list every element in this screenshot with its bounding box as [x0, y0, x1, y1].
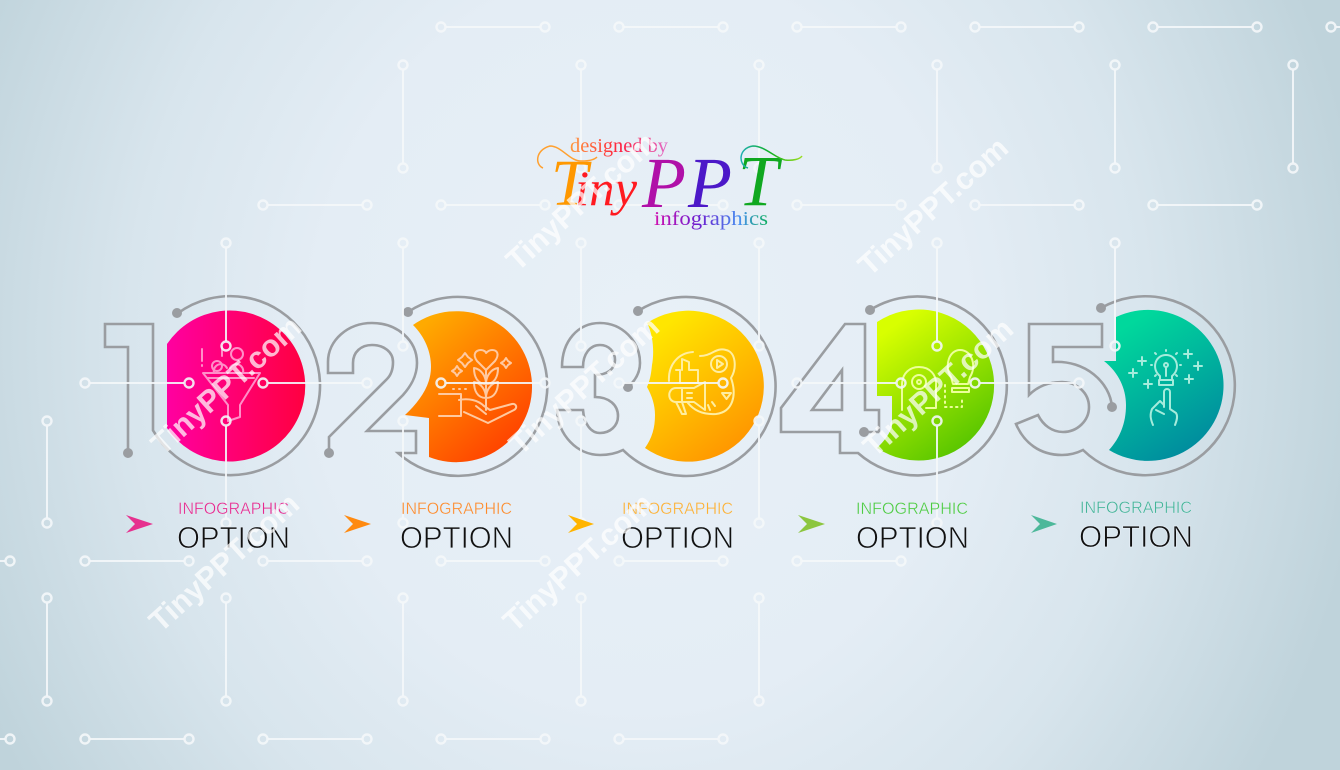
dot: ring 3 end — [633, 306, 643, 316]
dot: numeral 1 start — [123, 448, 133, 458]
watermarks: TinyPPT.com — [143, 487, 306, 639]
option 1 label — [126, 500, 290, 555]
arrow 1 — [126, 515, 153, 533]
logo line: infographics: infographics — [654, 208, 768, 230]
dot: ring 4 end — [865, 305, 875, 315]
outline: numeral 3 and ring — [557, 297, 776, 476]
watermarks: TinyPPT.com — [497, 487, 660, 639]
icon: funnel — [202, 347, 260, 421]
step 2: number and circle — [324, 297, 547, 476]
dot: numeral 5 start — [1107, 402, 1117, 412]
logo line: designed by: designed by — [570, 135, 668, 157]
dot: numeral 4 start — [859, 427, 869, 437]
fill: teal shape — [1104, 310, 1224, 461]
text 5: OPTION — [1079, 519, 1193, 554]
arrow 4 — [798, 515, 825, 533]
step 1: number and circle — [105, 296, 320, 475]
logo letter: T: T — [551, 147, 592, 220]
option 4 label — [798, 500, 969, 555]
logo word: iny: iny — [575, 160, 638, 216]
watermarks — [143, 126, 1020, 639]
outline: numeral 5 and ring — [1016, 296, 1235, 475]
logo letter: first P: P — [641, 143, 686, 223]
arrow 2 — [344, 515, 371, 533]
text 2: OPTION — [400, 520, 513, 555]
step 3: number and circle — [557, 297, 776, 476]
text 1: OPTION — [177, 520, 290, 555]
fill: yellow shape — [645, 311, 764, 462]
step 5: number and circle — [1016, 296, 1235, 475]
option 3 label — [568, 500, 734, 555]
logo swash: first T — [538, 146, 597, 168]
fill: orange shape — [405, 311, 532, 462]
dot: ring 5 end — [1096, 303, 1106, 313]
fill: pink circle — [167, 310, 305, 462]
option 5 label — [1031, 499, 1193, 554]
outline: numeral 4 counter — [812, 370, 842, 410]
icon: megaphone and social — [669, 349, 735, 414]
dot: numeral 2 start — [324, 448, 334, 458]
heading 1: INFOGRAPHIC — [178, 500, 289, 518]
arrow 5 — [1031, 515, 1057, 533]
option 2 label — [344, 500, 513, 555]
logo letter: last T: T — [738, 141, 783, 221]
dot: numeral 3 start — [623, 382, 633, 392]
icon: head gear and bulb — [902, 350, 973, 410]
outline: numeral 4 and ring — [781, 296, 1007, 475]
outline: numeral 2 and ring — [328, 297, 547, 476]
watermarks: TinyPPT.com — [503, 310, 666, 462]
text 3: OPTION — [621, 520, 734, 555]
icon: finger and light bulb — [1129, 350, 1202, 425]
dot: ring 2 end — [403, 307, 413, 317]
step 4: number and circle — [781, 296, 1007, 475]
heading 2: INFOGRAPHIC — [401, 500, 512, 518]
watermarks: TinyPPT.com — [852, 131, 1015, 283]
watermarks: TinyPPT.com — [857, 312, 1020, 464]
text 4: OPTION — [856, 520, 969, 555]
logo swash: last T — [741, 146, 802, 168]
fill: green shape — [877, 309, 994, 460]
arrow 3 — [568, 515, 594, 533]
dot: ring 1 end — [172, 308, 182, 318]
icon: plant in hand — [439, 350, 516, 423]
outline: numeral 1 and ring — [105, 296, 320, 475]
logo letter: second P: P — [687, 143, 732, 223]
watermarks: TinyPPT.com — [500, 126, 663, 278]
logo: designed by TinyPPT infographics — [538, 135, 802, 230]
heading 4: INFOGRAPHIC — [856, 500, 968, 518]
watermarks: TinyPPT.com — [145, 310, 308, 462]
heading 3: INFOGRAPHIC — [622, 500, 733, 518]
heading 5: INFOGRAPHIC — [1080, 499, 1192, 517]
